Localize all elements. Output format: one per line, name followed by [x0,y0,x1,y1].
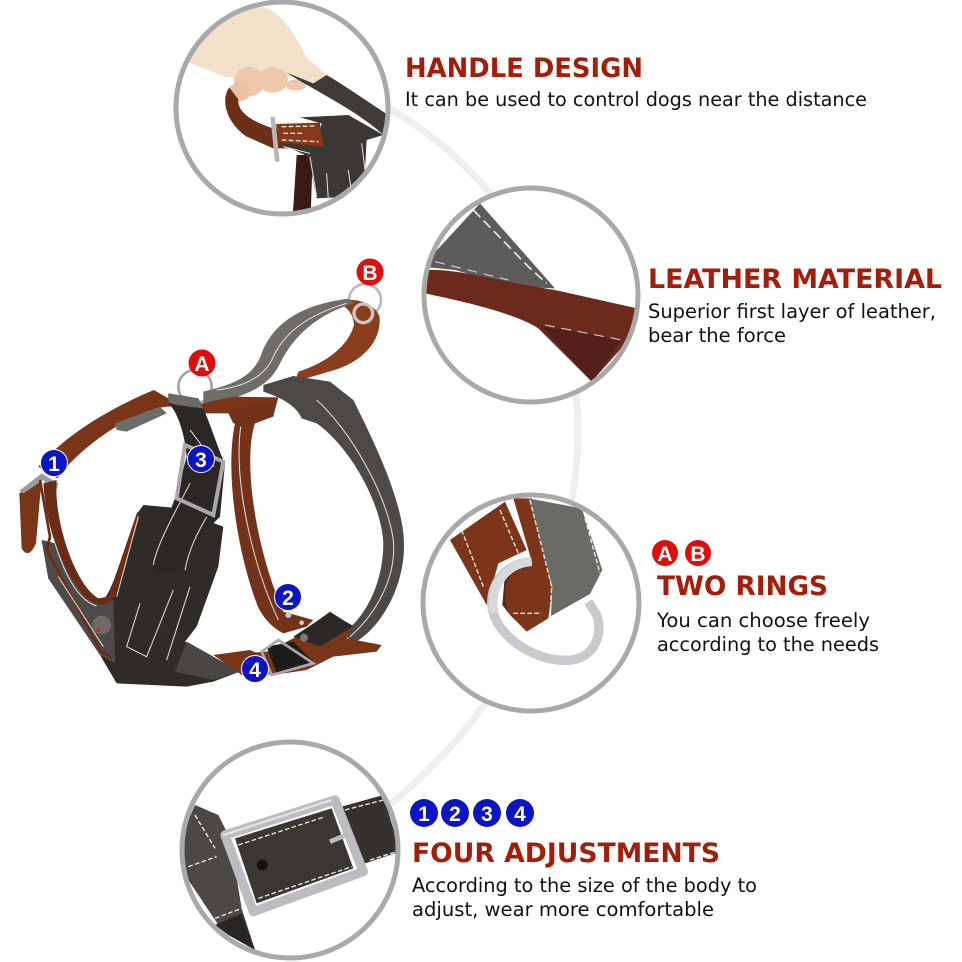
heading: two rings: TWO RINGS [657,571,828,602]
centre buckle [177,445,223,515]
heading: four adjustments: FOUR ADJUSTMENTS [412,838,720,869]
ring A [178,370,212,403]
badge 3: 3 [195,449,207,472]
ring B [349,284,381,316]
right strap grey [263,376,404,643]
left shoulder strap [38,390,187,478]
badge 4 [242,656,268,682]
text: handle design description: It can be used to control dogs near the distance [405,88,867,111]
handle underside [295,300,380,382]
badge A [188,350,216,376]
text: adjustments description: adjust, wear more comfortable [412,898,714,921]
badge 2: 2 [282,587,294,610]
badge A: A [194,353,210,376]
bottom leather flap [175,642,240,680]
badges: 1 2 3 4 [410,799,534,827]
text: leather description: Superior first layer of leather, [648,300,936,323]
text: adjustments description [412,874,757,921]
harness badges [40,258,384,682]
text: leather description: bear the force [648,324,786,347]
badge 4: 4 [249,659,261,682]
heading: handle design: HANDLE DESIGN [405,53,643,84]
heading: leather material: LEATHER MATERIAL [648,264,942,295]
badge 2 [274,584,302,610]
lower buckle tabs [213,612,382,675]
body left side and chest plate [42,505,240,687]
text: adjustments description: According to the size of the body to [412,874,757,897]
centre strap [152,393,225,575]
badge 1 [40,450,68,476]
connecting arc [385,108,578,808]
circle: handle photo [176,2,388,217]
text: leather description [648,300,936,347]
badge B [356,258,384,286]
harness photo [19,284,404,687]
left grey band [42,540,115,663]
top connector [200,397,278,424]
handle grey strap [203,299,354,413]
badges: 1 2 3 4: 1 [418,803,430,826]
left buckle and tail [19,478,42,553]
badge 1: 1 [48,453,60,476]
badge 3 [188,446,214,472]
circle: buckle photo [182,742,400,958]
circle: rings photo [423,495,639,711]
badges: 1 2 3 4: 3 [481,803,493,826]
badges: A B: B [690,543,706,566]
text: rings description: You can choose freely [656,609,870,632]
text: rings description: according to the needs [657,633,879,656]
circle: leather photo [422,188,638,402]
badges: A B [652,540,711,566]
badge B: B [362,262,378,285]
right strap brown [230,400,313,633]
badges: 1 2 3 4: 2 [449,803,461,826]
metal plate [115,407,167,432]
badges: A B: A [657,543,673,566]
text: rings description [656,609,879,656]
badges: 1 2 3 4: 4 [514,803,526,826]
